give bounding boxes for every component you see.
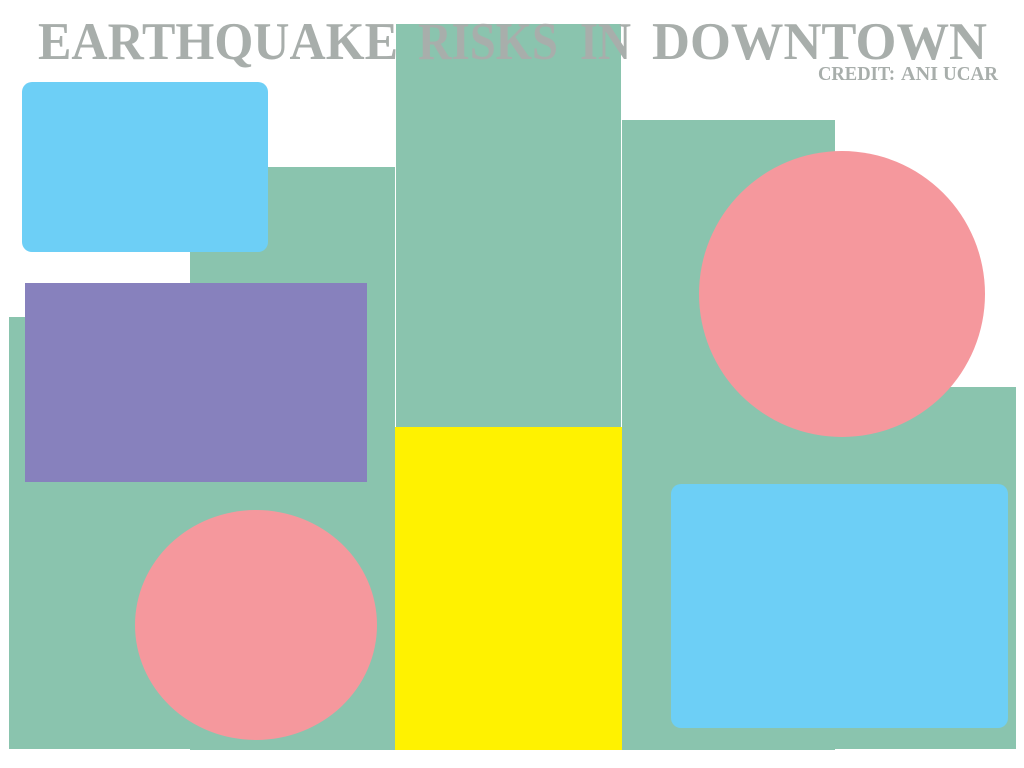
title: DOWNTOWN <box>652 13 987 71</box>
panel: yellow central block <box>395 427 622 750</box>
circle: pink bottom left <box>135 510 377 740</box>
credit: UCAR <box>943 63 999 85</box>
title: IN <box>580 13 631 71</box>
circle: pink top right <box>699 151 985 437</box>
panel: blue top left <box>22 82 268 252</box>
skyline: low right building <box>835 387 1016 749</box>
panel: purple block <box>25 283 367 482</box>
title: RISKS <box>418 13 558 71</box>
skyline: right building <box>622 120 835 750</box>
skyline: low left building <box>9 317 395 749</box>
title: EARTHQUAKE <box>38 13 398 71</box>
credit: CREDIT: <box>818 63 895 85</box>
title <box>38 13 987 71</box>
credit: ANI <box>901 63 938 85</box>
skyline: tall central tower <box>396 24 621 427</box>
panel: blue bottom right <box>671 484 1008 728</box>
skyline: second building <box>190 167 395 750</box>
credit <box>818 63 999 85</box>
